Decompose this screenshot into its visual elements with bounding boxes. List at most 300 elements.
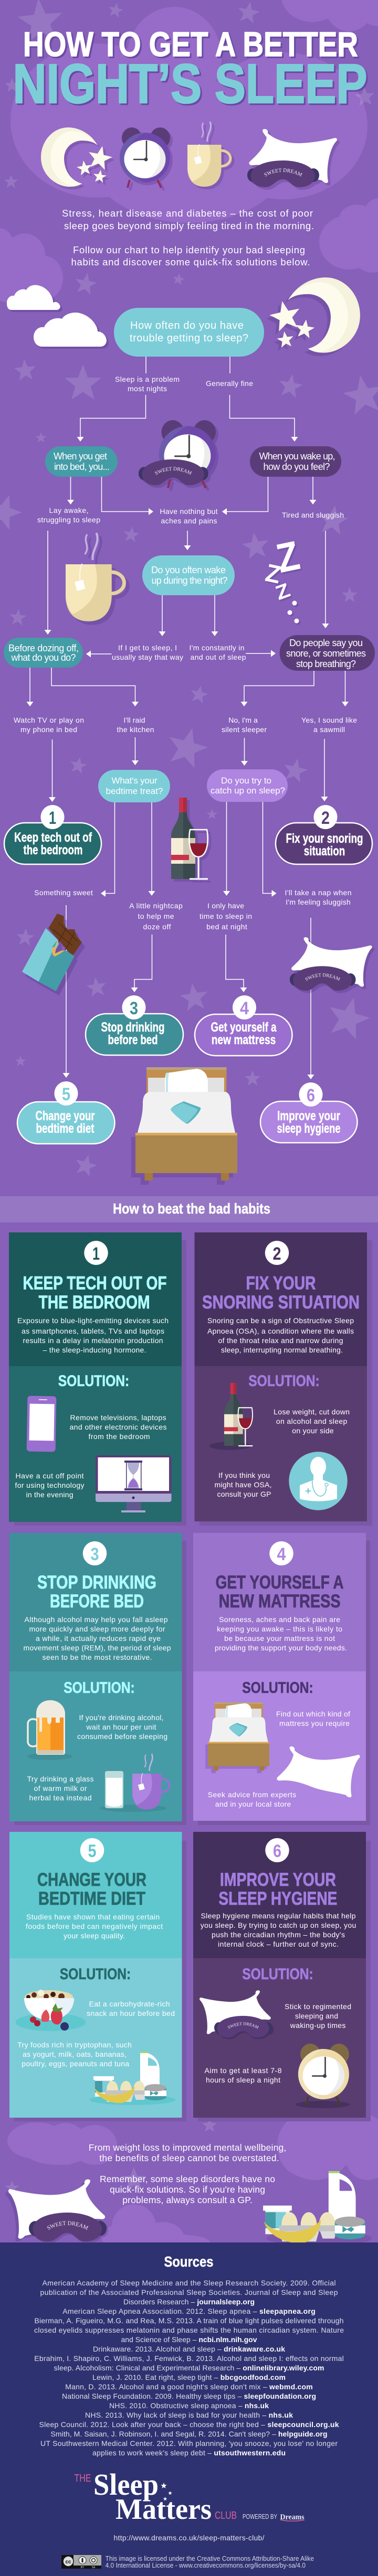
body text: sleep, interrupting normal breathing. <box>221 1346 343 1354</box>
icon: tea mug <box>187 122 230 187</box>
solution text <box>274 1408 350 1435</box>
icon: bed <box>131 1067 237 1185</box>
closing text <box>89 2142 286 2205</box>
sources list: American Academy of Sleep Medicine and the Sleep Research Society. 2009. Official <box>42 2279 336 2287</box>
logo: the sleep matters club: Matters <box>116 2493 212 2526</box>
body text: your sleep quality. <box>64 1931 125 1940</box>
result 5: 5 <box>62 1085 70 1104</box>
question: when you wake up: how do you feel? <box>264 461 330 472</box>
solution text: from the bedroom <box>88 1432 150 1441</box>
sources panel <box>0 2242 378 2576</box>
answer: watch tv: my phone in bed <box>20 725 77 734</box>
solution text: wait an hour per unit <box>86 1723 156 1731</box>
solution text <box>214 1471 272 1498</box>
answer: raid the kitchen: the kitchen <box>117 725 154 734</box>
heading: STOP DRINKING <box>37 1572 156 1593</box>
question: do people say you snore <box>279 635 375 671</box>
body text: be because your mattress is not <box>224 1634 335 1643</box>
body text: seen to be the most restorative. <box>42 1653 152 1661</box>
heading: CHANGE YOUR <box>37 1870 146 1890</box>
solution text: Remove televisions, laptops <box>70 1413 166 1422</box>
icon: zzz: Z <box>263 559 283 589</box>
question: catch up on sleep: catch up on sleep? <box>211 786 285 796</box>
result 4: new mattress <box>212 1033 276 1047</box>
sources list: Sleep Council. 2012. Look after your back – choose the right bed – sleepcouncil.org.uk <box>39 2420 339 2429</box>
result 5: Change your <box>36 1109 95 1123</box>
licence text: 4.0 International License - www.creativecommons.org/licenses/by-sa/4.0 <box>106 2562 306 2569</box>
icon: phone <box>27 1396 56 1452</box>
solution heading: SOLUTION: <box>242 1966 313 1983</box>
sources list: National Sleep Foundation. 2009. Healthy sleep tips – sleepfoundation.org <box>62 2392 316 2400</box>
answer: watch tv: Watch TV or play on <box>14 716 84 724</box>
panel: stop drinking before bed <box>9 1533 186 1825</box>
solution text: and in your local store <box>215 1800 291 1808</box>
solution text: of warm milk or <box>34 1784 87 1793</box>
question: when you get into bed <box>45 446 118 477</box>
panel: improve your sleep hygiene <box>32 1832 371 2121</box>
solution text: Eat a carbohydrate-rich <box>89 2000 170 2008</box>
answer: lay awake: struggling to sleep <box>37 516 100 524</box>
icon: tea mug large <box>66 533 124 621</box>
answer: nightcap: A little nightcap <box>129 901 183 910</box>
heading: GET YOURSELF A <box>216 1572 344 1593</box>
closing text: the benefits of sleep cannot be overstated. <box>99 2153 279 2163</box>
answer: nap: I'll take a nap when <box>285 888 352 897</box>
question: wake during the night: up during the night? <box>151 575 228 586</box>
arrow to result 4 <box>226 935 247 992</box>
icon: bed <box>205 1702 269 1773</box>
licence text: This image is licensed under the Creative Commons Attribution-Share Alike <box>106 2555 314 2562</box>
question: before dozing off: what do you do? <box>10 652 76 663</box>
result 6: 6 <box>307 1086 315 1105</box>
solution heading: SOLUTION: <box>242 1679 313 1697</box>
icon: doctor <box>289 1452 348 1510</box>
heading: KEEP TECH OUT OF <box>23 1273 167 1293</box>
result 3: 3 <box>130 999 138 1018</box>
answer: lay awake: Lay awake, <box>49 506 88 514</box>
icon: wine bottle <box>209 1383 253 1450</box>
answer: sleep is a problem: Sleep is a problem <box>115 375 180 383</box>
icon: zzz: Z <box>272 532 303 582</box>
question: when you wake up: When you wake up, <box>259 451 335 461</box>
arrow to silent sleeper <box>240 671 314 706</box>
question: do people say you snore: stop breathing? <box>296 659 356 669</box>
icon: clock with mask <box>139 420 218 491</box>
solution text: for using technology <box>15 1481 84 1489</box>
question: bedtime treat <box>98 770 170 802</box>
heading: FIX YOUR <box>246 1273 316 1293</box>
sources list: closed eyelids suppresses melatonin and phase shifts the human circadian system. Nature <box>34 2326 344 2334</box>
solution text: If you're drinking alcohol, <box>79 1713 164 1722</box>
solution text: mattress you require <box>279 1719 350 1727</box>
arrow to before dozing off <box>86 650 111 658</box>
logo: the sleep matters club: POWERED BY <box>243 2513 278 2520</box>
sources list: Smith, M. Saisan, J. Robinson, I. and Segal, R. 2014. Can't sleep? – helpguide.org <box>50 2430 328 2438</box>
solution text: hours of sleep a night <box>206 2076 280 2084</box>
icon: pillow <box>277 1746 360 1797</box>
question: before dozing off <box>4 638 83 668</box>
licence text <box>106 2555 314 2569</box>
icon: pillow and mask <box>200 1990 274 2039</box>
arrow to in and out of sleep <box>211 595 218 636</box>
solution text: Try drinking a glass <box>27 1775 93 1783</box>
arrow to catch up <box>241 738 248 766</box>
answer: stay that way: usually stay that way <box>112 653 183 661</box>
result 1: Keep tech out of <box>14 830 92 845</box>
panel: get yourself a new mattress: 4 <box>277 1544 286 1564</box>
body text: Although alcohol may help you fall asleep <box>24 1615 168 1624</box>
closing text: Remember, some sleep disorders have no <box>100 2174 275 2184</box>
body text <box>207 1316 354 1354</box>
answer: sawmill <box>301 716 357 734</box>
solution text <box>15 1472 84 1499</box>
icon: wine bottle and glass <box>171 798 208 879</box>
result 6: Improve your <box>277 1109 340 1123</box>
website url: http://www.dreams.co.uk/sleep-matters-club/ <box>113 2534 265 2542</box>
intro text <box>62 208 314 267</box>
arrow to nap <box>262 802 276 897</box>
question: catch up on sleep <box>207 769 288 802</box>
arrow to result 2 <box>321 739 328 801</box>
solution text: Find out which kind of <box>276 1710 350 1718</box>
question: before dozing off: Before dozing off, <box>8 643 79 653</box>
intro text: sleep goes beyond simply feeling tired in the morning. <box>64 220 314 231</box>
arrow to before dozing <box>44 531 51 635</box>
sources list: applies to work week's sleep debt – utsouthwestern.edu <box>92 2449 286 2457</box>
body text: Sleep hygiene means regular habits that help <box>201 1912 356 1920</box>
question: catch up on sleep: Do you try to <box>221 776 271 786</box>
solution text: Try foods rich in tryptophan, such <box>17 2041 132 2049</box>
icon: breakfast foods footer <box>263 2171 372 2246</box>
question: do people say you snore: snore, or sometimes <box>286 648 366 659</box>
solution text <box>87 2000 175 2017</box>
answer: something sweet: Something sweet <box>34 888 93 897</box>
icon: zzz <box>263 532 303 623</box>
heading: THE BEDROOM <box>39 1292 150 1313</box>
heading <box>23 1273 167 1313</box>
solution heading: SOLUTION: <box>58 1372 129 1390</box>
solution heading: SOLUTION: <box>60 1966 131 1983</box>
solution text: as yogurt, milk, oats, bananas, <box>23 2050 127 2058</box>
result 1 <box>4 805 101 864</box>
answer: stay that way: If I get to sleep, I <box>118 643 177 652</box>
arrow to get into bed <box>77 395 146 442</box>
solution text: Aim to get at least 7-8 <box>205 2066 282 2075</box>
answer: raid the kitchen <box>117 716 154 734</box>
flowchart start question: trouble getting to sleep? <box>130 332 248 344</box>
solution text <box>208 1790 296 1808</box>
solution text: Have a cut off point <box>16 1472 84 1480</box>
answer: raid the kitchen: I'll raid <box>124 716 145 724</box>
icon: clouds <box>7 285 107 347</box>
body text: Exposure to blue-light-emitting devices such <box>17 1316 169 1325</box>
arrow to result 5 <box>63 905 69 1078</box>
sources list: sleep. Alcoholism: Clinical and Experimental Research – onlinelibrary.wiley.com <box>54 2364 324 2372</box>
answer: nap: I'm feeling sluggish <box>286 898 351 906</box>
result 1: 1 <box>49 808 56 828</box>
arrow to snore question <box>322 531 329 628</box>
icon: moon and stars <box>41 127 114 187</box>
arrow to result 6 <box>308 918 314 1079</box>
arrow to wake in night <box>184 531 191 550</box>
answer: nightcap: to help me <box>138 912 174 920</box>
body text: keeping you awake – this is likely to <box>217 1625 342 1633</box>
icon: pillow and mask <box>290 937 374 993</box>
heading: NEW MATTRESS <box>219 1591 341 1612</box>
result 5: bedtime diet <box>36 1121 94 1136</box>
answer: silent sleeper <box>222 716 267 734</box>
heading <box>202 1273 360 1313</box>
body text <box>26 1913 163 1940</box>
result 3: before bed <box>108 1033 158 1047</box>
logo: the sleep matters club <box>75 2467 304 2526</box>
solution text: in the evening <box>26 1490 74 1499</box>
sources list: UT Southwestern Medical Center. 2012. With planning, 'you snooze, you lose' no longer <box>40 2439 338 2448</box>
answer: in and out of sleep: I'm constantly in <box>189 643 245 652</box>
panel: keep tech out of the bedroom: 1 <box>92 1244 100 1264</box>
answer: time to sleep <box>200 901 252 931</box>
heading: IMPROVE YOUR <box>220 1870 336 1890</box>
arrow to aches and pains right <box>222 477 268 515</box>
icon: breakfast foods <box>89 2052 175 2105</box>
sources list: Drinkaware. 2013. Alcohol and sleep – drinkaware.co.uk <box>93 2345 285 2353</box>
body text: you sleep. By trying to catch up on sleep, you <box>201 1921 356 1929</box>
heading: BEDTIME DIET <box>38 1888 145 1909</box>
solution text <box>27 1775 93 1802</box>
icon: zzz: Z <box>272 579 293 605</box>
result 3 <box>86 995 183 1055</box>
solution text <box>69 1413 167 1441</box>
body text: Soreness, aches and back pain are <box>219 1615 340 1624</box>
panel: stop drinking before bed: 3 <box>90 1544 99 1564</box>
arrow to sawmill <box>342 671 349 706</box>
solution text: consult your GP <box>217 1490 271 1498</box>
arrow to raid kitchen <box>51 668 139 706</box>
result 6 <box>260 1082 357 1143</box>
icon: pillow and sleep mask: SWEET DREAMS <box>264 168 302 176</box>
solution text: on alcohol and sleep <box>276 1417 348 1425</box>
arrow to something sweet <box>101 802 114 897</box>
result 2: situation <box>304 844 345 858</box>
icon: pillow and mask: SWEET DREAMS <box>228 2022 259 2029</box>
arrow to lay awake <box>67 477 74 505</box>
answer: sawmill: Yes, I sound like <box>301 716 357 724</box>
heading <box>218 1870 337 1909</box>
answer: aches and pains: Have nothing but <box>160 507 218 516</box>
body text: of the throat relax and narrow during <box>218 1336 343 1345</box>
answer: watch tv <box>14 716 84 734</box>
answer: tired and sluggish: Tired and sluggish <box>282 511 344 519</box>
creative commons badge: SA <box>92 2566 96 2569</box>
logo: the sleep matters club: THE <box>75 2473 91 2484</box>
sources list: Lewin, J. 2010. Eat right, sleep tight – bbcgoodfood.com <box>92 2373 286 2381</box>
answer: time to sleep: time to sleep in <box>200 912 252 920</box>
icon: cream alarm clock <box>286 2044 350 2108</box>
arrow to aches and pains left <box>102 477 153 515</box>
solution text: Seek advice from experts <box>208 1790 296 1799</box>
creative commons badge <box>61 2555 101 2569</box>
sources heading: Sources <box>164 2253 213 2270</box>
icon: moon with stars right <box>267 277 360 353</box>
solution text <box>77 1713 167 1741</box>
solution text: poultry, eggs, peanuts and tuna <box>22 2059 129 2068</box>
answer: time to sleep: bed at night <box>206 922 247 931</box>
solution text: and other electronic devices <box>69 1423 167 1431</box>
answer: lay awake <box>37 506 100 524</box>
question: do people say you snore: Do people say you <box>289 638 363 648</box>
intro text: Stress, heart disease and diabetes – the cost of poor <box>62 208 313 219</box>
body text: push the circadian rhythm – the body's <box>212 1930 345 1939</box>
intro text: Follow our chart to help identify your bad sleeping <box>73 244 305 255</box>
solution text: waking-up times <box>290 2021 345 2030</box>
panel: change your bedtime diet <box>9 1832 186 2121</box>
connectors from start question <box>146 357 230 373</box>
solution text <box>285 2002 351 2030</box>
sources list: Mann, D. 2013. Alcohol and a good night's sleep don't mix – webmd.com <box>65 2382 313 2391</box>
answer: aches and pains: aches and pains <box>161 517 217 525</box>
arrow to snore <box>246 650 276 657</box>
arrow to wake up <box>230 395 298 442</box>
heading <box>37 1870 146 1909</box>
answer: sawmill: a sawmill <box>313 725 345 734</box>
body text: – the sleep-inducing hormone. <box>43 1346 146 1354</box>
panel: keep tech out of the bedroom <box>9 1232 186 1526</box>
result 3: Stop drinking <box>101 1020 165 1035</box>
answer: nightcap: doze off <box>143 922 171 931</box>
answer: silent sleeper: No, I'm a <box>228 716 258 724</box>
banner: how to beat the bad habits: How to beat the bad habits <box>113 1200 270 1217</box>
answer: in and out of sleep <box>189 643 246 661</box>
icon: chocolate bar <box>22 914 82 991</box>
solution text: might have OSA, <box>214 1480 272 1489</box>
question: bedtime treat: bedtime treat? <box>106 786 163 796</box>
icon: milk and tea <box>100 1754 170 1812</box>
creative commons badge: cc <box>65 2559 71 2565</box>
result 6: sleep hygiene <box>277 1121 341 1136</box>
title <box>13 25 368 115</box>
question: when you wake up <box>250 446 341 477</box>
answer: nap <box>285 888 352 906</box>
question: when you get into bed: into bed, you... <box>54 461 110 472</box>
panel: fix your snoring situation: 2 <box>273 1244 281 1264</box>
body text <box>17 1316 169 1354</box>
arrow to result 1 <box>49 739 56 802</box>
question: bedtime treat: What's your <box>111 776 158 786</box>
body text: movement sleep (REM), the period of sleep <box>23 1644 171 1652</box>
intro text: habits and discover some quick-fix solutions below. <box>71 256 310 267</box>
heading: BEFORE BED <box>50 1591 144 1612</box>
result 2: 2 <box>321 808 330 828</box>
body text: Apnoea (OSA), a condition where the walls <box>207 1327 354 1335</box>
logo: the sleep matters club: Sleep <box>93 2467 159 2502</box>
closing text: problems, always consult a GP. <box>122 2195 253 2205</box>
arrow to bedtime treat <box>132 737 139 765</box>
sources list: NHS. 2013. Why lack of sleep is bad for your health – nhs.uk <box>85 2411 293 2419</box>
panel: improve your sleep hygiene: 6 <box>273 1841 281 1861</box>
icon: pillow and mask: SWEET DREAMS <box>305 943 361 991</box>
banner: how to beat the bad habits <box>0 1196 378 1222</box>
icon: pillow and sleep mask <box>247 129 340 190</box>
question: wake during the night: Do you often wake <box>151 565 226 575</box>
body text <box>23 1615 171 1661</box>
heading: SLEEP HYGIENE <box>218 1888 337 1909</box>
body text: as smartphones, tablets, TVs and laptops <box>22 1327 164 1335</box>
solution text: sleeping and <box>295 2012 338 2020</box>
body text: more quickly and sleep more deeply for <box>29 1625 165 1633</box>
closing text: From weight loss to improved mental wellbeing, <box>89 2142 286 2153</box>
panel: get yourself a new mattress <box>193 1533 370 1825</box>
solution text <box>17 2041 132 2068</box>
answer: silent sleeper: silent sleeper <box>222 725 267 734</box>
sources list: NHS. 2010. Obstructive sleep apnoea – nhs.uk <box>109 2401 269 2410</box>
arrow to tired <box>310 477 316 505</box>
solution text: If you think you <box>218 1471 270 1479</box>
icon: alarm clock <box>108 127 170 188</box>
sources list <box>34 2279 344 2457</box>
result 2 <box>276 805 372 864</box>
answer: nightcap <box>129 901 183 931</box>
body text: results in a delay in melatonin production <box>23 1336 163 1345</box>
solution text: consumed before sleeping <box>77 1732 167 1741</box>
arrow to nightcap <box>148 802 155 896</box>
answer: sleep is a problem: most nights <box>128 384 167 393</box>
solution text <box>276 1710 350 1727</box>
flowchart start question: How often do you have <box>130 320 244 331</box>
arrow to watch tv <box>26 668 34 706</box>
arrow to only have time <box>223 802 230 896</box>
solution text: herbal tea instead <box>29 1794 91 1802</box>
result 4: 4 <box>240 999 249 1018</box>
question: wake during the night <box>142 555 235 595</box>
body text <box>201 1912 356 1948</box>
solution heading: SOLUTION: <box>64 1679 135 1697</box>
solution text: Lose weight, cut down <box>274 1408 350 1416</box>
sources list: Ebrahim, I. Shapiro, C. Williams, J. Fenwick, B. 2013. Alcohol and sleep I: effects on normal <box>34 2354 344 2363</box>
result 1: the bedroom <box>23 843 83 857</box>
result 5 <box>17 1081 114 1144</box>
logo: the sleep matters club: CLUB <box>215 2510 237 2521</box>
result 4 <box>195 995 292 1056</box>
sources list: Bierman, A. Figueiro, M.G. and Rea, M.S. 2013. A train of blue light pulses delivered through <box>35 2316 343 2325</box>
creative commons badge: BY <box>81 2566 85 2569</box>
body text <box>215 1615 347 1652</box>
body text: Studies have shown that eating certain <box>26 1913 160 1921</box>
body text: Snoring can be a sign of Obstructive Sleep <box>207 1316 354 1325</box>
sources list: and Science of Sleep – ncbi.nlm.nih.gov <box>121 2335 257 2344</box>
answer: generally fine: Generally fine <box>206 379 253 388</box>
closing text: quick-fix solutions. So if you're having <box>110 2184 265 2195</box>
solution text: on your side <box>292 1426 334 1435</box>
panel: change your bedtime diet: 5 <box>88 1841 97 1861</box>
body text: foods before bed can negatively impact <box>26 1922 163 1930</box>
body text: providing the support your body needs. <box>215 1644 347 1652</box>
panel: fix your snoring situation <box>194 1232 372 1526</box>
solution text: snack an hour before bed <box>87 2009 175 2017</box>
logo: the sleep matters club: Dreams <box>280 2513 304 2521</box>
answer: stay that way <box>112 643 183 661</box>
solution text <box>205 2066 282 2084</box>
flowchart start question <box>114 308 264 357</box>
body text: a while, it actually reduces rapid eye <box>36 1634 161 1643</box>
answer: aches and pains <box>160 507 218 525</box>
answer: sleep is a problem <box>115 375 180 393</box>
arrow to stay asleep <box>159 595 166 636</box>
icon: cereal bowl and berries <box>16 1990 86 2031</box>
body text: internal clock – further out of sync. <box>218 1940 339 1948</box>
sources list: publication of the Associated Professional Sleep Societies. Journal of Sleep and Sleep <box>40 2288 338 2296</box>
heading <box>216 1572 344 1612</box>
sources list: American Sleep Apnea Association. 2012. Sleep apnea – sleepapnea.org <box>62 2307 316 2315</box>
